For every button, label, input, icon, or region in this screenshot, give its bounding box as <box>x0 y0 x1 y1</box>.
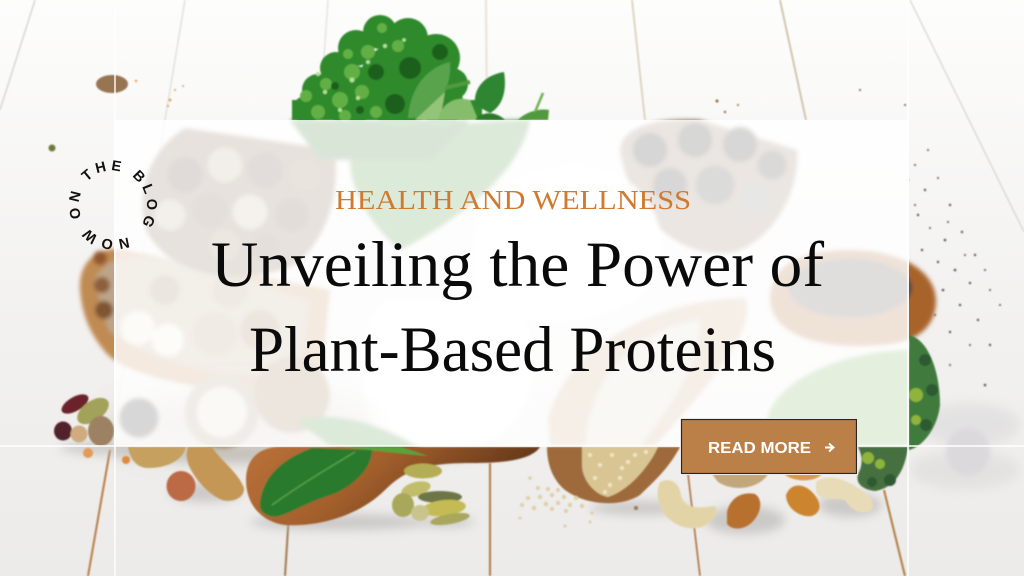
icon: chia seeds scatter <box>859 89 1001 386</box>
spinach leaves <box>408 62 450 118</box>
foods seen through the panel <box>80 120 936 457</box>
icon: quinoa spoon <box>547 447 680 503</box>
icon: peanuts <box>128 447 244 501</box>
faded green leaves <box>290 120 910 455</box>
icon: kale and spinach bunch <box>292 15 549 127</box>
button label: READ MORE <box>708 440 811 457</box>
title <box>211 229 824 386</box>
panel: translucent white overlay <box>114 120 909 446</box>
eyebrow heading: HEALTH AND WELLNESS <box>335 185 691 215</box>
bowl of black beans <box>620 120 797 253</box>
bowl of chia and quinoa scoop <box>548 250 936 446</box>
bowl of coffee beans <box>142 128 336 277</box>
soft shadows on the table <box>60 403 1020 534</box>
title line 1: Unveiling the Power of <box>211 229 824 301</box>
icon: pumpkin seeds <box>392 464 471 527</box>
icon: mixed beans <box>54 390 130 464</box>
icon: broccoli <box>857 335 940 491</box>
title line 2: Plant-Based Proteins <box>249 314 776 386</box>
icon: water droplet on table <box>946 428 990 476</box>
icon: spoon with spinach leaf <box>246 447 540 525</box>
badge: circular "now on the blog" text: NOW ON THE BLOG <box>69 160 158 250</box>
button: read more <box>680 418 858 475</box>
white leaf highlights <box>362 165 662 445</box>
walnuts and dark nut <box>110 357 380 457</box>
icon: small nut and lentils top left <box>48 75 739 152</box>
bowl of mixed nuts <box>80 249 330 393</box>
icon: arrow <box>825 444 834 452</box>
icon: cashews and almonds <box>658 474 873 528</box>
icon: scattered quinoa <box>518 476 638 528</box>
